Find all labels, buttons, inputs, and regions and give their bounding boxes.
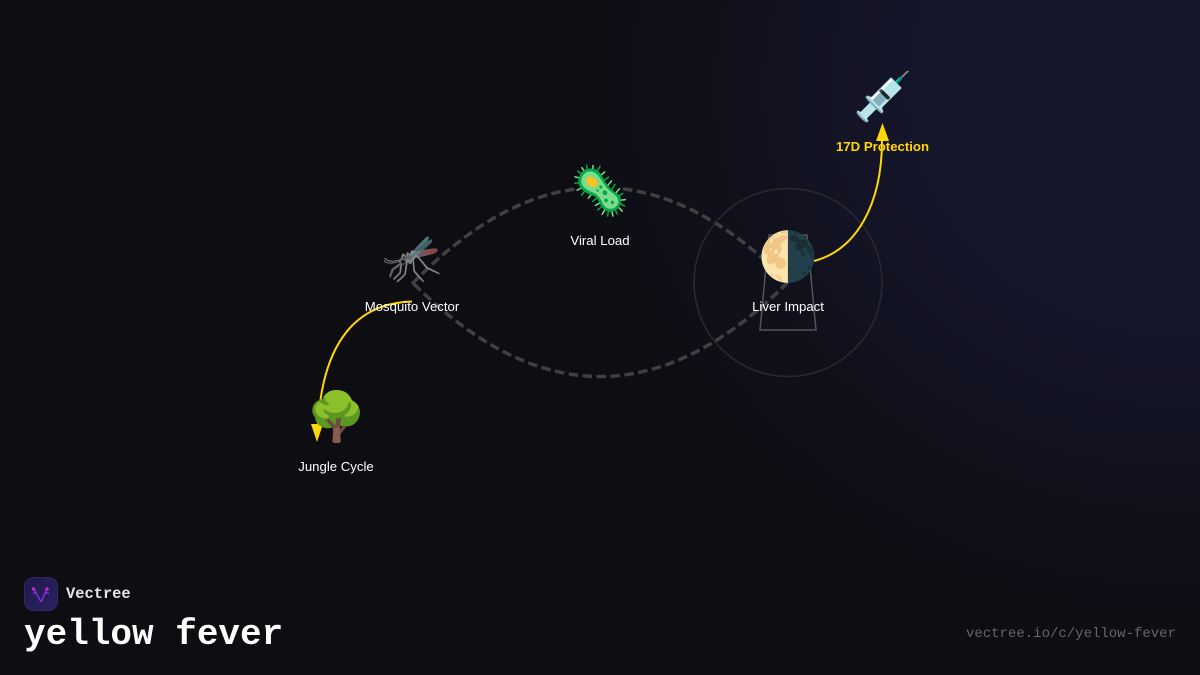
node: liver: 🌗 bbox=[758, 228, 818, 285]
label: mosquito: Mosquito Vector bbox=[365, 299, 459, 314]
title: yellow fever bbox=[24, 614, 283, 655]
dashed edge: virus to liver bbox=[623, 189, 788, 282]
arrow: liver to vaccine bbox=[814, 123, 889, 261]
brand logo bbox=[24, 577, 58, 611]
label: virus: Viral Load bbox=[570, 233, 630, 248]
label: protection: 17D Protection bbox=[836, 139, 929, 154]
liver ring bbox=[694, 188, 882, 376]
dashed edge: mosquito to virus bbox=[412, 189, 577, 284]
node: virus: 🦠 bbox=[570, 162, 630, 219]
arrow: mosquito to jungle bbox=[311, 302, 412, 442]
liver trapezoid bbox=[760, 235, 816, 330]
node: mosquito: 🦟 bbox=[382, 229, 442, 286]
dashed edge: liver to mosquito bbox=[412, 282, 788, 376]
node: tree: 🌳 bbox=[307, 388, 366, 445]
label: liver: Liver Impact bbox=[752, 299, 824, 314]
label: tree: Jungle Cycle bbox=[298, 459, 374, 474]
node: syringe: 💉 bbox=[853, 68, 913, 125]
source url: vectree.io/c/yellow-fever bbox=[966, 626, 1176, 642]
brand name: Vectree bbox=[66, 585, 131, 603]
